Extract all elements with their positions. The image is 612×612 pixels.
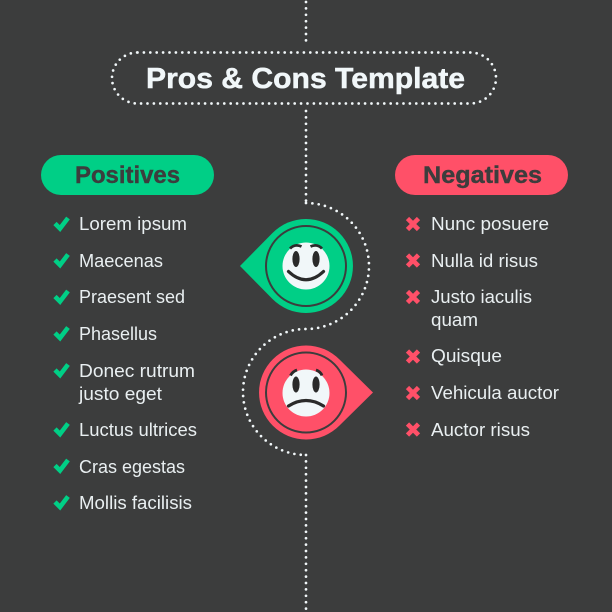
cross list: Quisque: [431, 346, 502, 366]
check list: Lorem ipsum: [79, 214, 187, 234]
icon: happy face marker: [240, 219, 353, 313]
panel: positives: [41, 155, 214, 513]
cross list: quam: [431, 310, 478, 330]
cross list: Vehicula auctor: [431, 383, 559, 403]
check list: [55, 214, 197, 513]
check list: Maecenas: [79, 251, 163, 271]
icon: sad face marker: [259, 346, 373, 440]
heading: positives: Positives: [75, 162, 180, 189]
cross list: Nunc posuere: [431, 214, 549, 234]
cross list: Justo iaculis: [431, 287, 532, 307]
dotted timeline connector: [243, 2, 369, 612]
cross list: Nulla id risus: [431, 251, 538, 271]
heading: negatives: [395, 155, 568, 195]
check list: justo eget: [78, 384, 162, 404]
check list: Cras egestas: [79, 457, 185, 477]
cross list: Auctor risus: [431, 420, 530, 440]
title block: [112, 52, 496, 104]
heading: positives: [41, 155, 214, 195]
heading: negatives: Negatives: [423, 162, 542, 189]
check list: Praesent sed: [79, 287, 185, 307]
cross list: [408, 214, 559, 440]
check list: Mollis facilisis: [79, 493, 192, 513]
check list: Phasellus: [79, 324, 157, 344]
check list: Donec rutrum: [79, 361, 195, 381]
check list: Luctus ultrices: [79, 420, 197, 440]
title block: Pros & Cons Template: [146, 63, 465, 95]
panel: negatives: [395, 155, 568, 440]
